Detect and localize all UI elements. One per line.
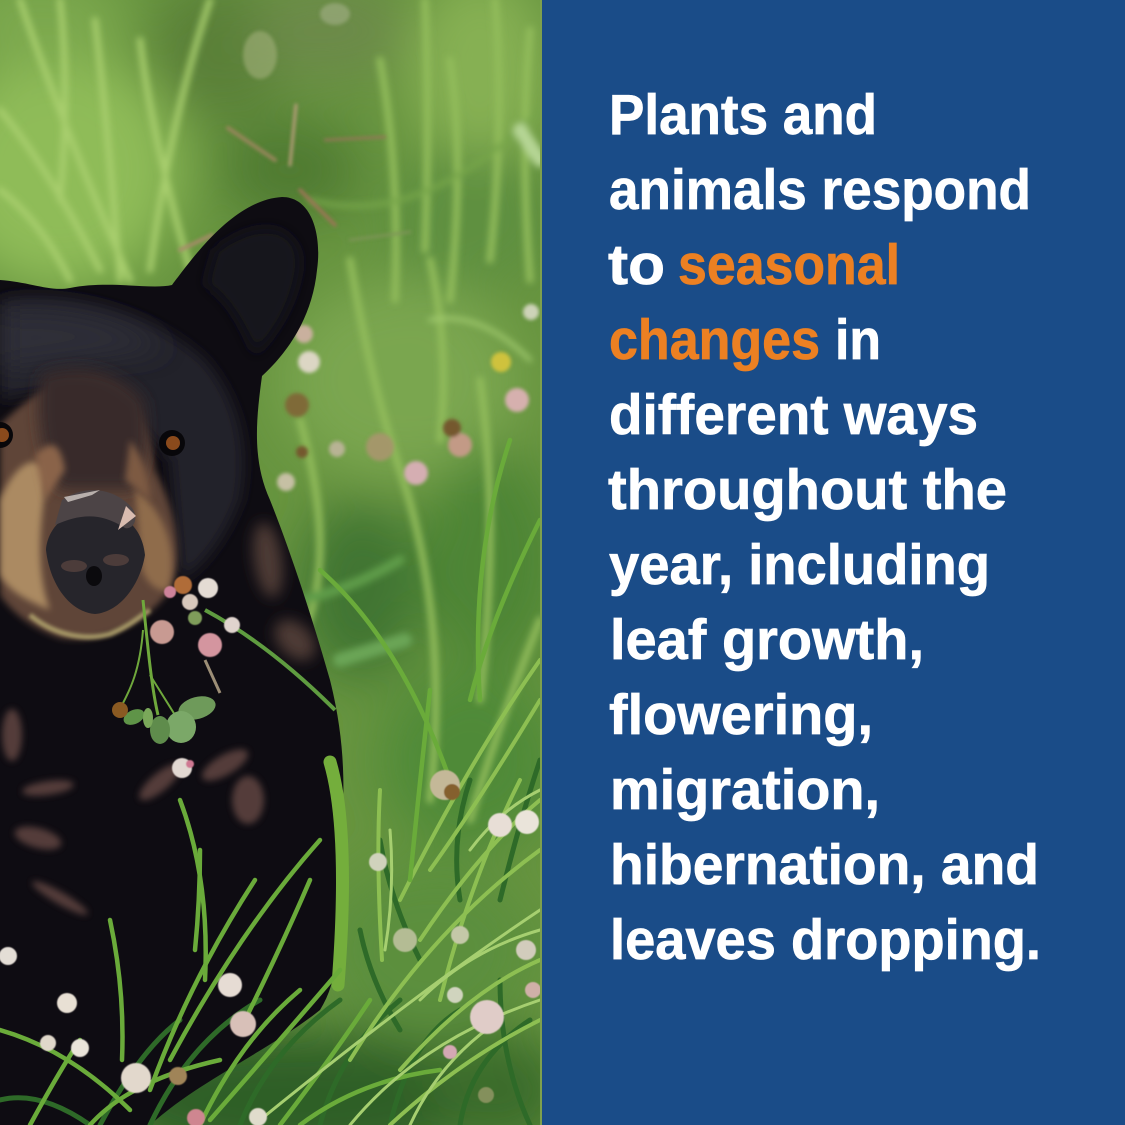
text block: main message: changes — [609, 308, 820, 372]
text block: main message — [608, 83, 1041, 972]
nose — [46, 510, 145, 614]
panel: blue background — [542, 0, 1125, 1125]
text block: main message: Plants and — [609, 83, 877, 147]
clover blossoms in foreground — [0, 770, 541, 1125]
body brown streaks in fur — [249, 520, 323, 668]
green edge — [540, 0, 542, 1125]
text block: main message: leaves dropping. — [610, 908, 1041, 972]
clover blossoms — [150, 576, 240, 778]
panel: bear photo — [0, 0, 570, 1125]
forehead and muzzle fur — [0, 378, 177, 639]
bear — [0, 197, 343, 1125]
blurred blades crossing chest — [2, 709, 264, 919]
blurred meadow background — [0, 0, 570, 1125]
text block: main message: migration, — [610, 758, 880, 822]
text block: main message: hibernation, and — [610, 833, 1039, 897]
fur sheen on head — [0, 298, 244, 580]
text block: main message: in — [835, 308, 881, 372]
reeds at top — [180, 105, 410, 250]
text block: main message: leaf growth, — [610, 608, 924, 672]
text block: main message: throughout the — [608, 458, 1007, 522]
blurred background blossoms — [243, 3, 539, 491]
clover sprig in mouth — [112, 576, 335, 778]
eyes — [159, 430, 185, 456]
bear body and head silhouette — [0, 197, 343, 1125]
text block: main message: different ways — [609, 383, 978, 447]
text block: main message: seasonal — [678, 233, 900, 297]
foreground grass — [0, 440, 540, 1125]
text block: main message: flowering, — [609, 683, 873, 747]
text block: main message: to — [608, 233, 665, 297]
text block: main message: year, including — [609, 533, 990, 597]
text block: main message: animals respond — [609, 158, 1031, 222]
dark under-grass — [0, 760, 540, 1125]
soft background blades — [0, 0, 540, 820]
clover leaves — [178, 696, 216, 720]
